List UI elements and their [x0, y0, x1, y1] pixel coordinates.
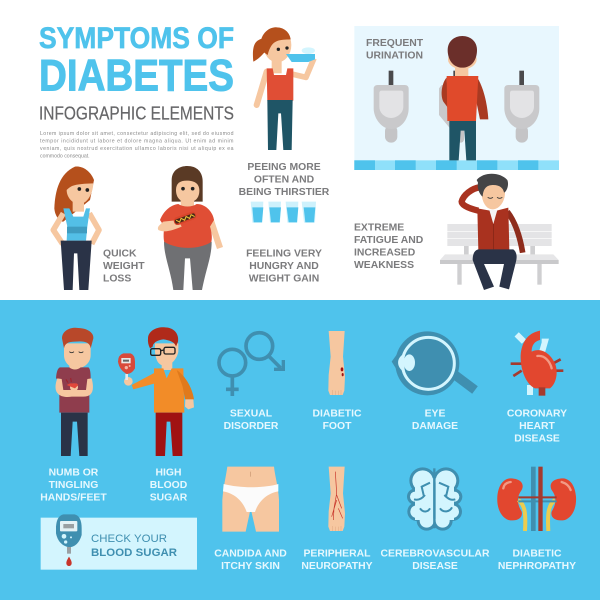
label: coronary heart disease: HEART	[519, 421, 556, 432]
panel: frequent urination scene	[354, 26, 559, 170]
label: candida	[214, 549, 287, 572]
panel: blue lower background	[0, 300, 600, 600]
icon: water glasses	[251, 202, 316, 223]
title	[39, 22, 234, 100]
icon: glucose meter	[56, 514, 82, 566]
label: feeling hungry: WEIGHT GAIN	[249, 274, 319, 285]
label: peeing more	[239, 162, 330, 198]
text block: lorem ipsum: commodo consequat.	[40, 154, 90, 160]
icon: diabetic foot	[328, 331, 345, 395]
text block: lorem ipsum: veniam, quis nostrud exercitation ullamco laboris nisi ut aliquip ex ea	[40, 146, 234, 152]
label: sexual disorder	[224, 409, 279, 432]
icon: middle urinal	[439, 71, 467, 143]
label: high blood sugar	[150, 468, 188, 504]
label: numb or tingling	[40, 468, 107, 504]
label: frequent urination: FREQUENT	[366, 38, 424, 49]
label: cerebrovascular disease: DISEASE	[412, 561, 458, 572]
label: quick weight loss	[103, 249, 145, 285]
icon: underwear torso	[222, 467, 279, 532]
figure: man from behind	[442, 36, 488, 160]
label: peeing more: BEING THIRSTIER	[239, 187, 330, 198]
icon: brain	[407, 467, 462, 531]
label: coronary heart disease: CORONARY	[507, 409, 567, 420]
text block: lorem ipsum: tempor incididunt ut labore et dolore magna aliqua. Ut enim ad minim	[40, 138, 233, 144]
label: feeling hungry: HUNGRY AND	[249, 261, 319, 272]
label: peripheral neuropathy: NEUROPATHY	[301, 561, 373, 572]
label: candida: ITCHY SKIN	[221, 561, 280, 572]
label: diabetic foot: FOOT	[323, 421, 352, 432]
figure: thin woman	[53, 167, 99, 290]
label: peeing more: PEEING MORE	[247, 162, 321, 173]
figure: tired man on bench	[440, 174, 559, 290]
text block: lorem ipsum: Lorem ipsum dolor sit amet, consectetur adipiscing elit, sed do eiusmod	[40, 131, 234, 137]
icon: peripheral neuropathy foot	[328, 467, 345, 531]
label: frequent urination: URINATION	[366, 50, 423, 62]
label: high blood sugar: HIGH	[156, 468, 181, 479]
label: frequent urination	[366, 38, 424, 62]
panel: check your blood sugar	[41, 514, 197, 570]
figure: man checking blood sugar	[118, 327, 194, 456]
label: feeling hungry	[246, 249, 322, 285]
label: eye damage: DAMAGE	[412, 421, 458, 432]
icon: heart	[511, 331, 563, 396]
icon: kidneys	[497, 467, 576, 531]
label: extreme fatigue: WEAKNESS	[354, 260, 414, 271]
figure: woman drinking water	[253, 27, 315, 150]
label: peripheral neuropathy: PERIPHERAL	[304, 549, 371, 560]
text: check your blood sugar	[91, 533, 177, 559]
label: quick weight loss: LOSS	[103, 274, 131, 285]
icon: bench	[440, 224, 559, 285]
label: numb or tingling: NUMB OR	[49, 468, 99, 479]
label: eye damage	[412, 409, 458, 432]
icon: right urinal	[504, 71, 539, 143]
label: feeling hungry: FEELING VERY	[246, 249, 322, 260]
label: coronary heart disease: DISEASE	[514, 434, 560, 445]
label: sexual disorder: SEXUAL	[230, 409, 273, 420]
icon: left urinal	[374, 71, 409, 143]
label: extreme fatigue: FATIGUE AND	[354, 235, 424, 246]
icon: eye with magnifier	[392, 331, 475, 395]
label: numb or tingling: HANDS/FEET	[40, 493, 107, 504]
title: SYMPTOMS OF	[39, 22, 234, 55]
label: high blood sugar: BLOOD	[150, 480, 188, 491]
label: cerebrovascular disease	[381, 549, 490, 572]
label: peeing more: OFTEN AND	[254, 174, 315, 186]
label: coronary heart disease	[507, 409, 567, 445]
icon: sex symbols	[219, 333, 283, 396]
text block: lorem ipsum	[40, 131, 234, 160]
title: DIABETES	[39, 52, 234, 100]
label: diabetic nephropathy: NEPHROPATHY	[498, 561, 576, 572]
label: cerebrovascular disease: CEREBROVASCULAR	[381, 549, 490, 560]
subtitle: INFOGRAPHIC ELEMENTS	[39, 102, 234, 124]
label: extreme fatigue	[354, 223, 424, 271]
label: diabetic nephropathy: DIABETIC	[512, 549, 562, 560]
label: diabetic foot	[312, 409, 362, 432]
text: check your blood sugar: BLOOD SUGAR	[91, 547, 177, 559]
label: high blood sugar: SUGAR	[150, 493, 188, 504]
label: extreme fatigue: INCREASED	[354, 248, 416, 259]
label: numb or tingling: TINGLING	[49, 480, 98, 491]
figure: overweight woman with hot dog	[158, 166, 219, 290]
text: check your blood sugar: CHECK YOUR	[91, 533, 167, 545]
figure: man with numb hands	[56, 328, 93, 456]
label: sexual disorder: DISORDER	[224, 421, 279, 432]
label: diabetic nephropathy	[498, 549, 576, 572]
label: peripheral neuropathy	[301, 549, 373, 572]
label: extreme fatigue: EXTREME	[354, 223, 404, 234]
label: candida: CANDIDA AND	[214, 549, 287, 560]
label: diabetic foot: DIABETIC	[312, 409, 362, 420]
label: quick weight loss: WEIGHT	[103, 261, 145, 272]
label: quick weight loss: QUICK	[103, 249, 137, 260]
label: eye damage: EYE	[425, 409, 445, 420]
